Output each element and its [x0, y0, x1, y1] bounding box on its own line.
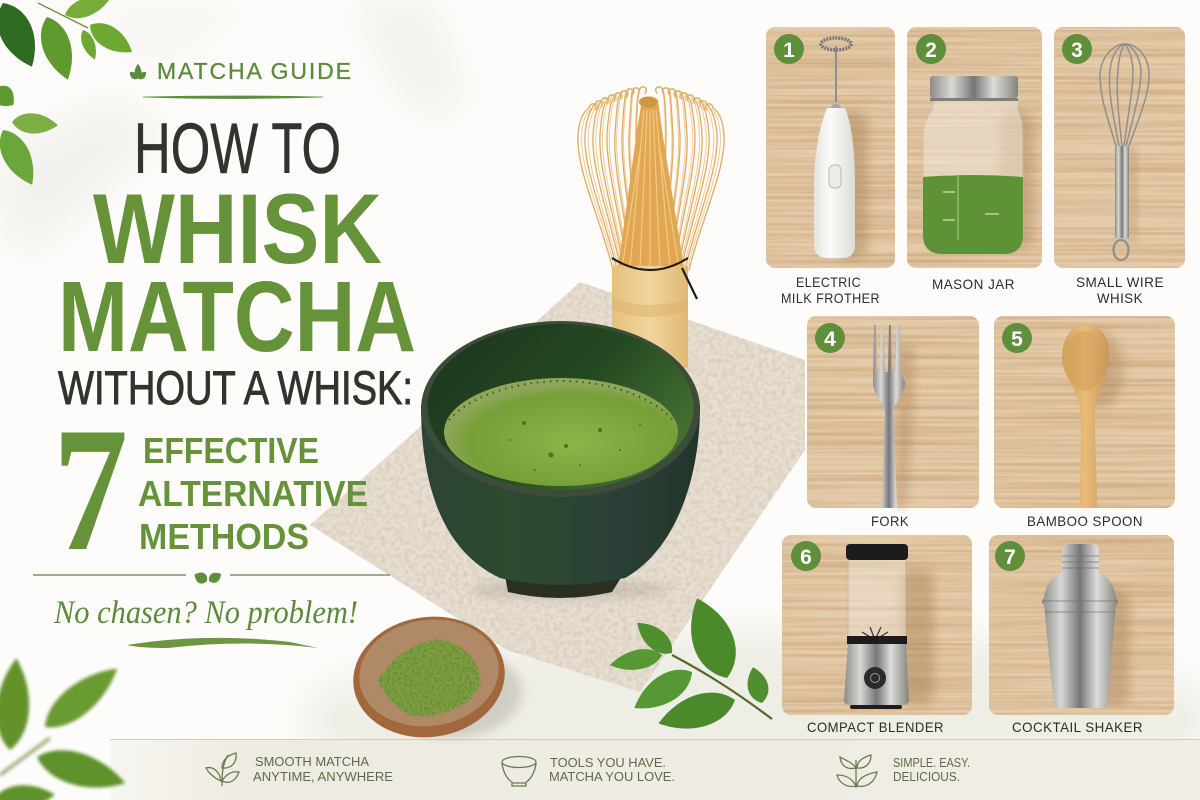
- powder: [378, 640, 480, 716]
- icon: sprout: [206, 753, 239, 786]
- footer item: tools you have: MATCHA YOU LOVE.: [549, 769, 675, 784]
- subtitle: 7 effective alternative methods: METHODS: [139, 516, 309, 557]
- tool 5: bamboo spoon: [994, 316, 1175, 529]
- tea bowl: [421, 321, 700, 599]
- badge 4: 4: [824, 328, 836, 351]
- title: WITHOUT A WHISK:: [58, 361, 413, 414]
- badge 2: 2: [925, 39, 937, 62]
- icon: plant: [837, 755, 877, 788]
- eyebrow: matcha guide: MATCHA GUIDE: [157, 58, 351, 84]
- tool 2: mason jar: [907, 27, 1042, 292]
- back tines: [655, 87, 720, 270]
- badge 5: 5: [1011, 328, 1023, 351]
- matcha surface: [444, 378, 678, 486]
- card 4: [807, 316, 979, 508]
- thread: [612, 258, 697, 299]
- frother: [814, 38, 868, 260]
- handle: [612, 266, 688, 368]
- card 5: [994, 316, 1175, 508]
- label 3: [1076, 274, 1164, 306]
- foam dots: [449, 381, 673, 420]
- inner cone: [618, 96, 684, 268]
- badge 7: 7: [1004, 546, 1016, 569]
- footer item: simple easy delicious: DELICIOUS.: [893, 769, 960, 784]
- footer item: simple easy delicious: SIMPLE. EASY.: [893, 755, 970, 770]
- badge 3: 3: [1071, 39, 1083, 62]
- footer item: tools you have: [502, 755, 675, 786]
- footer item: smooth matcha: ANYTIME, ANYWHERE: [253, 769, 393, 784]
- subtitle: 7 effective alternative methods: [53, 390, 368, 588]
- jar: [923, 76, 1034, 254]
- floor shading: [300, 630, 1200, 800]
- decorative leaves: bottom left: [0, 657, 130, 800]
- wooden dish with matcha powder: [345, 607, 522, 747]
- badge 6: 6: [800, 546, 812, 569]
- spoon: [1062, 325, 1124, 508]
- title: WHISK: [93, 173, 382, 284]
- label 6: COMPACT BLENDER: [807, 719, 944, 735]
- tagline: No chasen? No problem!: [53, 595, 358, 631]
- card 2: [907, 27, 1042, 268]
- label 2: MASON JAR: [932, 276, 1015, 292]
- label 4: FORK: [871, 513, 909, 529]
- divider with leaf icon: [33, 569, 390, 586]
- title: [58, 110, 416, 414]
- card 6: [782, 535, 972, 715]
- title: HOW TO: [134, 110, 341, 189]
- title: MATCHA: [58, 261, 416, 373]
- badge 6: [791, 541, 821, 571]
- label 1: MILK FROTHER: [781, 290, 880, 306]
- subtitle: 7 effective alternative methods: ALTERNATIVE: [138, 473, 368, 514]
- card 1: [766, 27, 895, 268]
- subtitle: 7 effective alternative methods: 7: [53, 390, 128, 588]
- badge 3: [1062, 34, 1092, 64]
- badge 7: [995, 541, 1025, 571]
- tool 4: fork: [807, 316, 979, 529]
- label 5: BAMBOO SPOON: [1027, 513, 1143, 529]
- tool 7: cocktail shaker: [989, 535, 1174, 735]
- badge 1: [774, 34, 804, 64]
- card 7: [989, 535, 1174, 715]
- bottom information band: [110, 739, 1200, 800]
- footer item: smooth matcha: [206, 753, 393, 786]
- eyebrow: matcha guide: [128, 58, 351, 98]
- napkin: [310, 282, 805, 692]
- tool 3: small wire whisk: [1054, 27, 1185, 306]
- front tines: [656, 87, 724, 270]
- bamboo whisk (chasen): [578, 87, 724, 368]
- tool 1: electric milk frother: [766, 27, 895, 306]
- footer item: smooth matcha: SMOOTH MATCHA: [255, 754, 369, 769]
- shaker: [1042, 544, 1130, 708]
- tea leaf sprig: [608, 591, 772, 739]
- label 3: SMALL WIRE: [1076, 274, 1164, 290]
- icon: bowl: [502, 756, 536, 786]
- brush stroke: [127, 638, 318, 648]
- fork: [873, 325, 914, 508]
- rim: [421, 321, 700, 497]
- soft window shadows: [0, 0, 470, 250]
- badge 2: [916, 34, 946, 64]
- bubbles: [509, 421, 641, 471]
- subtitle: 7 effective alternative methods: EFFECTIVE: [143, 430, 319, 471]
- label 7: COCKTAIL SHAKER: [1012, 719, 1143, 735]
- badge 1: 1: [783, 39, 795, 62]
- card 3: [1054, 27, 1185, 268]
- blender: [844, 544, 934, 709]
- label 1: [781, 274, 880, 306]
- label 1: ELECTRIC: [796, 274, 861, 290]
- footer item: simple easy delicious: [837, 755, 970, 788]
- whisk: [1100, 44, 1149, 260]
- footer item: tools you have: TOOLS YOU HAVE.: [550, 755, 666, 770]
- badge 4: [815, 323, 845, 353]
- tool 6: compact blender: [782, 535, 972, 735]
- badge 5: [1002, 323, 1032, 353]
- label 3: WHISK: [1097, 290, 1143, 306]
- icon: small leaf: [128, 64, 148, 81]
- decorative leaves: top left: [0, 0, 138, 191]
